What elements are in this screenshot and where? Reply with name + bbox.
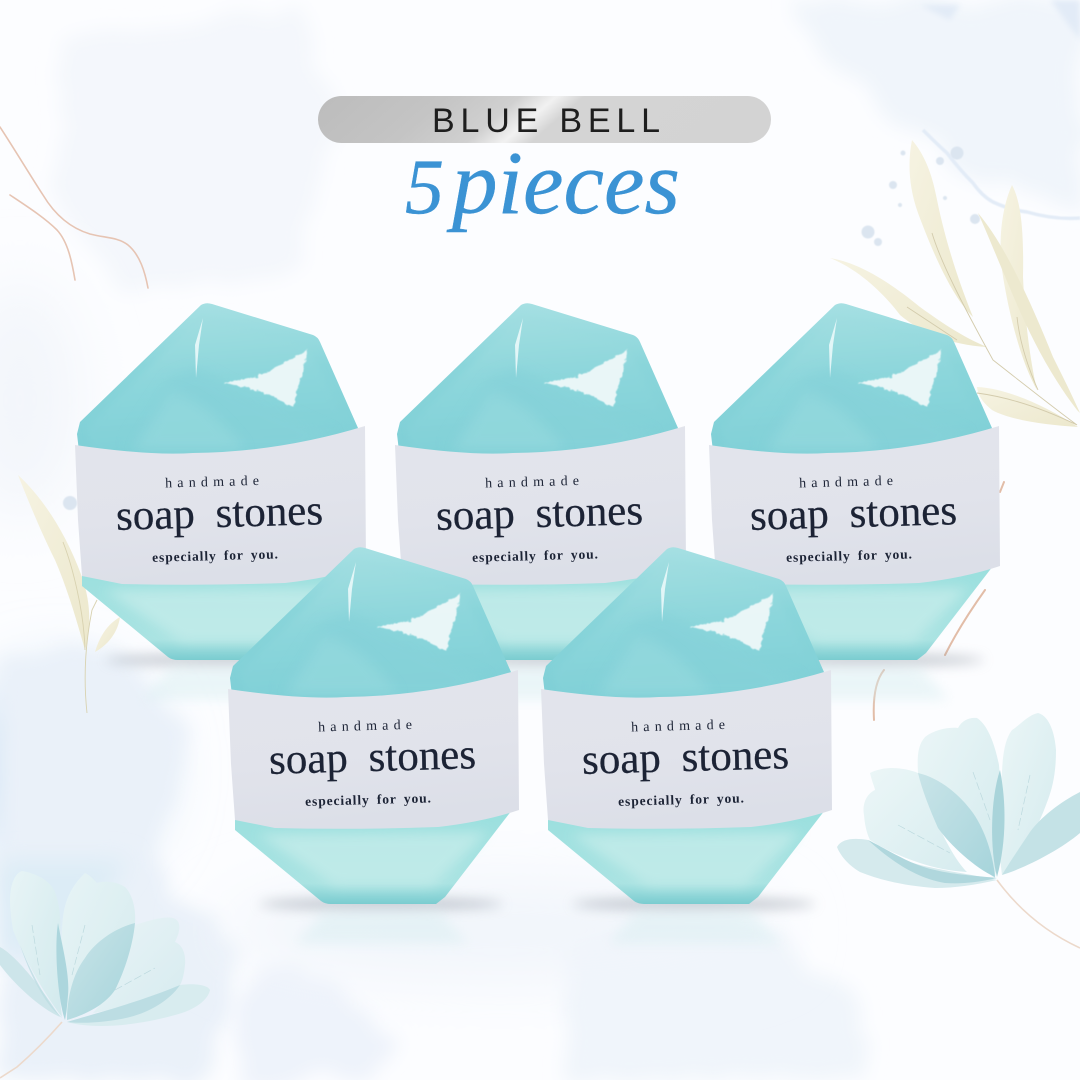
- wash edge and paint spots: top right: [63, 130, 1080, 510]
- label text: soap stones: [268, 731, 477, 784]
- label text: handmade: [485, 474, 584, 492]
- subtitle: 5: [405, 143, 444, 230]
- label text: handmade: [799, 474, 898, 492]
- label text: [581, 716, 790, 810]
- label text: especially for you.: [786, 546, 913, 565]
- label text: especially for you.: [305, 790, 432, 809]
- label text: soap stones: [115, 487, 324, 540]
- label text: [268, 716, 477, 810]
- label text: especially for you.: [472, 546, 599, 565]
- label text: [749, 472, 958, 566]
- soap: back left: [75, 303, 366, 700]
- label text: [435, 472, 644, 566]
- decorative leaves: top right: [830, 140, 1080, 427]
- label text: soap stones: [435, 487, 644, 540]
- decorative branch: top left: [0, 127, 148, 288]
- subtitle: pieces: [446, 134, 680, 233]
- label text: especially for you.: [152, 546, 279, 565]
- pill title: BLUE BELL: [432, 102, 660, 140]
- label text: especially for you.: [618, 790, 745, 809]
- label text: handmade: [631, 718, 730, 736]
- pill badge: [318, 96, 771, 143]
- label text: [115, 472, 324, 566]
- label text: soap stones: [749, 487, 958, 540]
- soap: back right: [709, 303, 1000, 700]
- decorative branch: behind right soap: [874, 482, 1004, 720]
- flower: bottom left: [0, 871, 210, 1078]
- soap: back centre: [395, 303, 686, 700]
- label text: soap stones: [581, 731, 790, 784]
- flower: right: [837, 713, 1080, 948]
- decorative leaves: left: [18, 475, 120, 713]
- label text: handmade: [165, 474, 264, 492]
- label text: handmade: [318, 718, 417, 736]
- soap: front right: [541, 547, 832, 944]
- soap: front left: [228, 547, 519, 944]
